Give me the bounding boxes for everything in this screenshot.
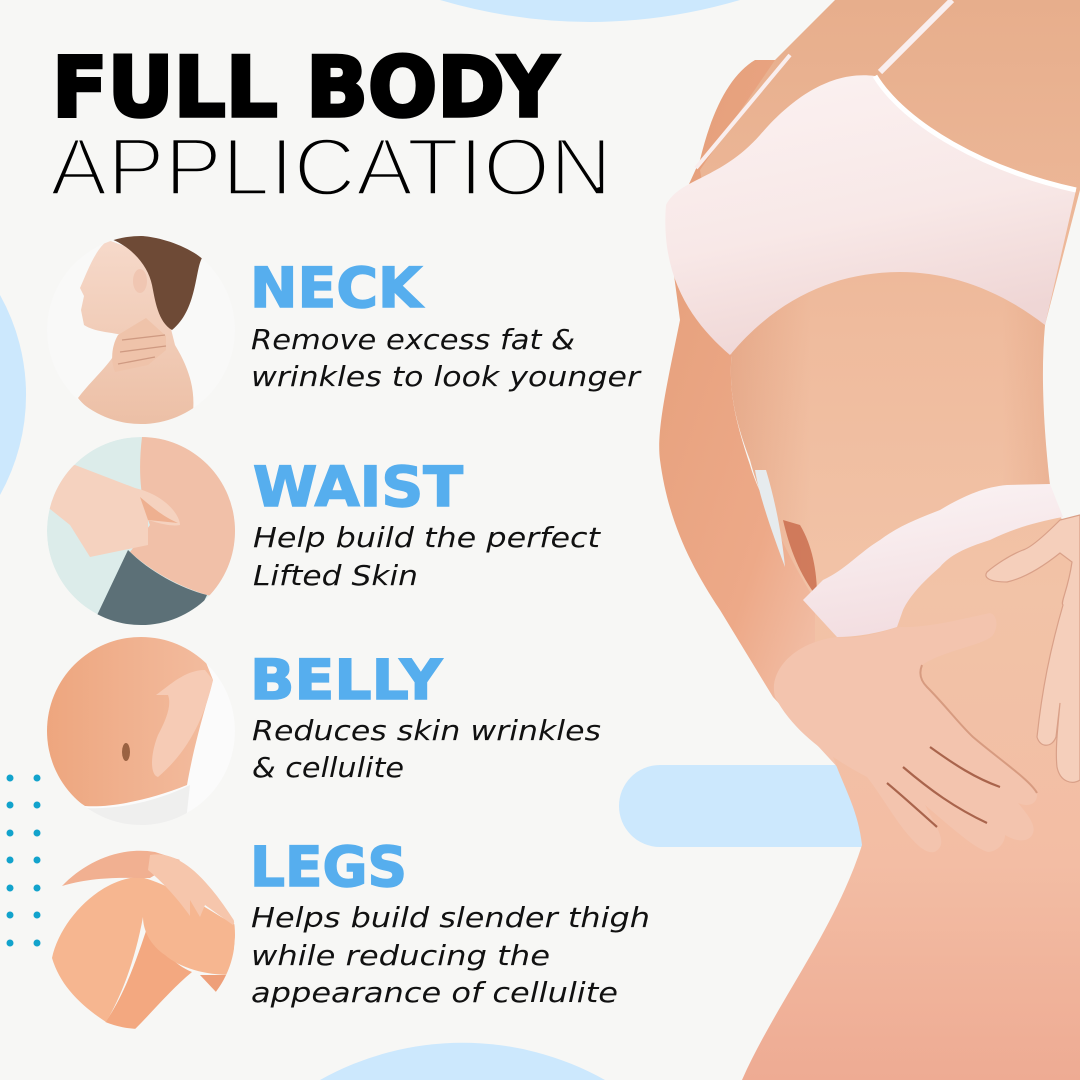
item: belly <box>250 648 601 784</box>
decorative dots <box>6 774 40 946</box>
item: legs <box>250 835 650 1009</box>
item: legs: Helps build slender thigh <box>251 901 650 934</box>
item: neck <box>250 256 642 393</box>
gap between arm and waist <box>755 470 785 567</box>
item: waist: Help build the perfect <box>253 521 601 554</box>
item: waist <box>253 455 601 592</box>
legs photo <box>52 850 235 1029</box>
waist shadow <box>783 520 817 597</box>
item: waist: WAIST <box>253 455 464 519</box>
item: belly: BELLY <box>250 648 443 712</box>
item: belly: Reduces skin wrinkles <box>252 714 601 747</box>
left hand <box>774 613 1037 852</box>
item: neck: NECK <box>250 256 424 320</box>
far arm and shoulder <box>659 60 900 770</box>
right hand <box>986 515 1080 782</box>
item: legs: appearance of cellulite <box>251 976 618 1009</box>
item: neck: wrinkles to look younger <box>251 360 642 393</box>
title: APPLICATION <box>50 122 612 213</box>
belly photo <box>47 637 213 806</box>
title: FULL BODY <box>52 39 559 136</box>
torso edge shading <box>731 220 1050 600</box>
torso and thigh <box>700 0 1080 1080</box>
hero figure <box>659 0 1080 1080</box>
waist photo <box>45 437 240 630</box>
title <box>50 39 612 213</box>
neck photo <box>78 236 202 424</box>
item: waist: Lifted Skin <box>253 559 418 592</box>
bra <box>665 0 1076 355</box>
item: neck: Remove excess fat & <box>251 323 575 356</box>
item: belly: & cellulite <box>252 751 404 784</box>
item: legs: LEGS <box>250 835 407 899</box>
briefs <box>803 484 1063 637</box>
item: legs: while reducing the <box>251 939 550 972</box>
